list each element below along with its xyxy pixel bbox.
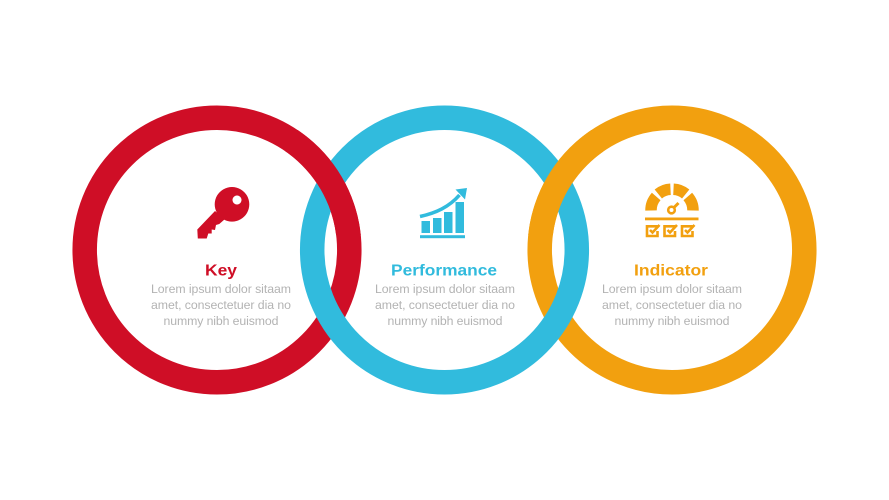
infographic <box>72 106 817 394</box>
text block: indicator <box>602 282 742 328</box>
ring: blue <box>312 118 577 382</box>
interlocked rings <box>85 118 804 382</box>
text block: indicator: Lorem ipsum dolor sitaam <box>602 282 742 296</box>
heading: key: Key <box>205 262 237 280</box>
ring: red <box>85 118 349 382</box>
text block: performance <box>375 282 515 328</box>
text block: key: nummy nibh euismod <box>164 314 279 328</box>
heading: performance: Performance <box>391 262 497 280</box>
text block: performance: Lorem ipsum dolor sitaam <box>375 282 515 296</box>
icon: gauge with checkboxes <box>645 189 698 236</box>
text block: key: amet, consectetuer dia no <box>151 298 291 312</box>
icon: key <box>197 187 249 238</box>
ring overlap: red over blue <box>285 130 361 235</box>
heading: indicator: Indicator <box>634 262 708 280</box>
panel: performance <box>375 188 515 328</box>
text block: performance: amet, consectetuer dia no <box>375 298 515 312</box>
ring: orange <box>540 118 804 382</box>
panel: indicator <box>602 189 742 328</box>
text block: indicator: nummy nibh euismod <box>614 314 730 328</box>
text block: key <box>151 282 291 328</box>
text block: performance: nummy nibh euismod <box>388 314 503 328</box>
panel: key <box>151 187 291 328</box>
text block: indicator: amet, consectetuer dia no <box>602 298 742 312</box>
icon: growth chart <box>420 188 467 238</box>
text block: key: Lorem ipsum dolor sitaam <box>151 282 291 296</box>
ring overlap: orange over blue <box>528 130 603 235</box>
